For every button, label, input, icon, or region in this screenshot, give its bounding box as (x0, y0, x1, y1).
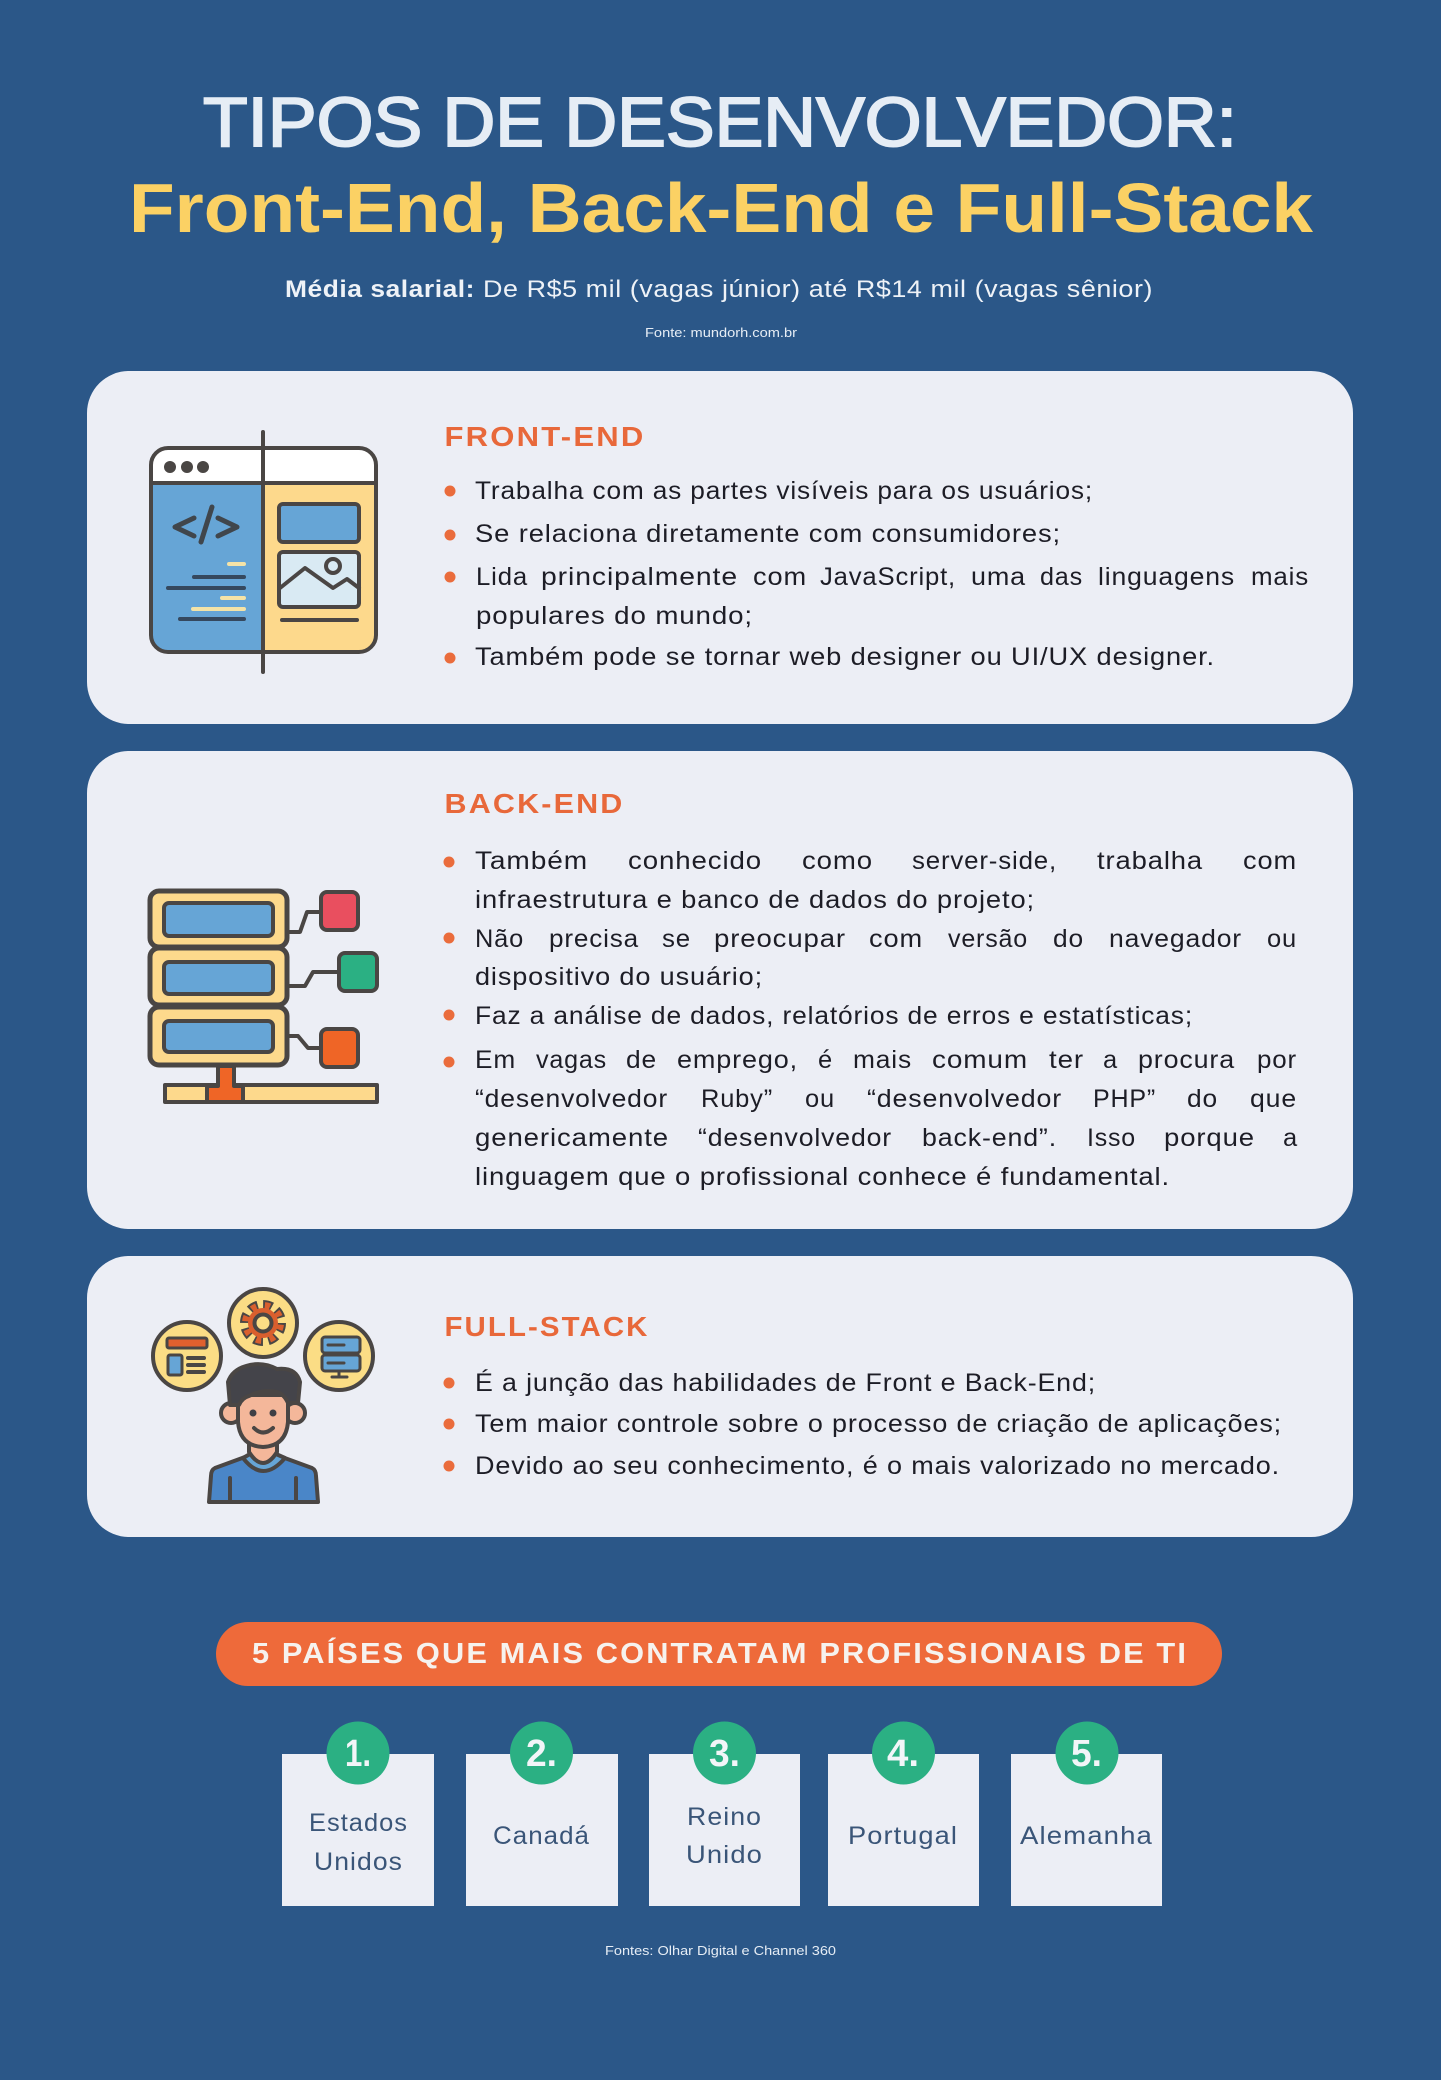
bullet list: back-end: comum (932, 1046, 1028, 1074)
bullet list: back-end: conhecido (628, 847, 762, 875)
bullet list: back-end: com (1243, 847, 1297, 875)
bullet list: back-end: precisa (549, 925, 639, 953)
bullet list: back-end: ter (1049, 1046, 1084, 1074)
country card 3: 3. (709, 1733, 740, 1775)
bullet list: back-end: do (1187, 1085, 1218, 1113)
country card 5: Alemanha (1020, 1822, 1153, 1850)
bullet list: back-end: navegador (1109, 925, 1242, 953)
bullet list: back-end: a (1283, 1124, 1298, 1152)
bullet list: back-end: procura (1138, 1046, 1235, 1074)
panel: back-end (87, 751, 1353, 1229)
subtitle: salary: Média salarial: (285, 276, 475, 303)
country card 2: Canadá (493, 1822, 590, 1850)
bullet list: back-end: infraestrutura e banco de dados do projeto; (475, 886, 1035, 914)
bullet list: back-end: Em (475, 1046, 516, 1074)
subtitle: salary: De R$5 mil (vagas júnior) até R$14 mil (vagas sênior) (483, 276, 1153, 303)
country card 1: 1. (345, 1733, 371, 1775)
bullet list: back-end: ou (1267, 925, 1297, 953)
heading: back-end: BACK-END (444, 788, 624, 819)
bullet list: back-end: linguagem que o profissional conhece é fundamental. (475, 1163, 1170, 1191)
country card 3 (649, 1722, 800, 1906)
banner: countries heading: 5 PAÍSES QUE MAIS CONTRATAM PROFISSIONAIS DE TI (252, 1636, 1188, 1670)
bullet list: back-end: “desenvolvedor (475, 1085, 668, 1113)
bullet list: front-end: principalmente (541, 563, 738, 591)
banner: countries heading (216, 1622, 1222, 1686)
bullet list: full-stack: É a junção das habilidades de Front e Back-End; (475, 1368, 1096, 1397)
bullet list: front-end: uma (971, 563, 1026, 591)
heading: full-stack: FULL-STACK (444, 1311, 650, 1342)
bullet list: back-end: Faz a análise de dados, relatórios de erros e estatísticas; (475, 1002, 1193, 1030)
country card 3: Unido (686, 1841, 763, 1869)
icon: server (150, 891, 377, 1102)
bullet list: back-end: Não (475, 925, 524, 953)
country card 2 (466, 1722, 618, 1906)
bullet list: back-end: trabalha (1097, 847, 1203, 875)
bullet list: front-end: populares do mundo; (476, 602, 753, 630)
title (129, 83, 1313, 247)
bullet list: back-end: Isso (1087, 1124, 1136, 1152)
panel: full-stack (87, 1256, 1353, 1537)
bullet list: back-end: como (802, 847, 873, 875)
bullet list: back-end: dispositivo do usuário; (475, 963, 763, 991)
panel: front-end (87, 371, 1353, 724)
bullet list: full-stack (444, 1368, 1282, 1480)
bullet list: back-end: Também (475, 847, 588, 875)
source note: countries: Fontes: Olhar Digital e Channel 360 (605, 1943, 836, 1958)
bullet list: back-end: se (662, 925, 691, 953)
bullet list: front-end: das (1040, 563, 1083, 591)
bullet list: front-end: JavaScript, (820, 563, 956, 591)
bullet list: front-end: mais (1251, 563, 1309, 591)
bullet list: back-end: por (1257, 1046, 1297, 1074)
bullet list: back-end: emprego, (677, 1046, 798, 1074)
bullet list: back-end: mais (853, 1046, 912, 1074)
country card 4: Portugal (848, 1822, 958, 1850)
bullet list: back-end: de (626, 1046, 657, 1074)
bullet list: back-end: porque (1164, 1124, 1255, 1152)
bullet list: back-end: com (869, 925, 923, 953)
bullet list: back-end: preocupar (714, 925, 846, 953)
bullet list: back-end: Ruby” (701, 1085, 773, 1113)
bullet list: back-end: versão (948, 925, 1028, 953)
bullet list: back-end: “desenvolvedor (867, 1085, 1062, 1113)
country card 5 (1011, 1722, 1162, 1906)
icon: browser window (151, 432, 376, 672)
bullet list: back-end: back-end”. (922, 1124, 1057, 1152)
bullet list: front-end: Também pode se tornar web designer ou UI/UX designer. (475, 643, 1215, 671)
heading: front-end: FRONT-END (444, 421, 646, 452)
country card 1 (282, 1722, 434, 1906)
bullet list: front-end: Lida (476, 563, 528, 591)
bullet list: back-end (444, 847, 1298, 1191)
bullet list: front-end: linguagens (1098, 563, 1235, 591)
bullet list: back-end: ou (805, 1085, 835, 1113)
bullet list: full-stack: Tem maior controle sobre o processo de criação de aplicações; (475, 1410, 1282, 1438)
bullet list: back-end: do (1053, 925, 1084, 953)
country card 4 (828, 1722, 979, 1906)
title: TIPOS DE DESENVOLVEDOR: (203, 83, 1237, 161)
country card 1: Unidos (314, 1848, 403, 1876)
country card 5: 5. (1071, 1733, 1102, 1775)
country card 3: Reino (687, 1803, 762, 1831)
country card 2: 2. (526, 1733, 557, 1775)
country card 4: 4. (887, 1733, 919, 1775)
bullet list: front-end: Se relaciona diretamente com consumidores; (475, 520, 1061, 548)
bullet list: front-end: Trabalha com as partes visíveis para os usuários; (475, 477, 1093, 505)
bullet list: back-end: vagas (536, 1046, 607, 1074)
source note: Fonte: mundorh.com.br (645, 325, 798, 340)
bullet list: back-end: PHP” (1093, 1085, 1156, 1113)
icon: developer with skills (153, 1289, 373, 1502)
bullet list: full-stack: Devido ao seu conhecimento, é o mais valorizado no mercado. (475, 1452, 1280, 1480)
title: Front-End, Back-End e Full-Stack (129, 169, 1313, 247)
bullet list: front-end: com (753, 563, 807, 591)
bullet list: back-end: é (818, 1046, 833, 1074)
bullet list: back-end: que (1250, 1085, 1297, 1113)
bullet list: back-end: “desenvolvedor (698, 1124, 892, 1152)
bullet list: back-end: server-side, (912, 847, 1057, 875)
bullet list: back-end: a (1103, 1046, 1118, 1074)
bullet list: back-end: genericamente (475, 1124, 669, 1152)
bullet list: front-end (444, 477, 1309, 671)
country card 1: Estados (309, 1809, 408, 1837)
